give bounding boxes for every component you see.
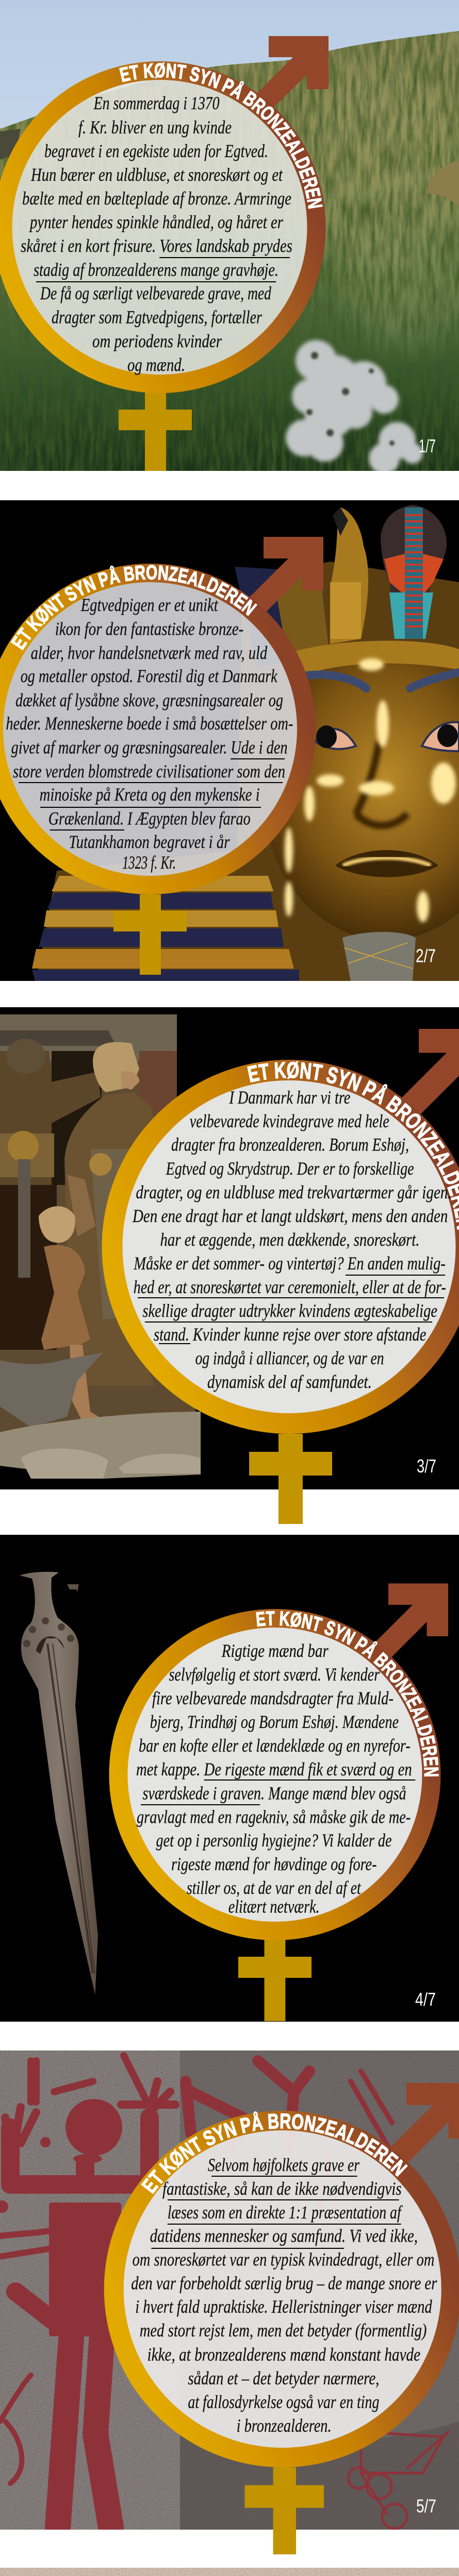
- body text: og mænd.: [127, 354, 185, 375]
- body text: [136, 1640, 415, 1917]
- text disc: [123, 2130, 442, 2448]
- body text: f. Kr. bliver en ung kvinde: [78, 117, 232, 138]
- body text: store verden blomstrede civilisationer som den: [13, 761, 285, 782]
- icon: male arrow: [382, 2083, 459, 2168]
- body text: Grækenland. I Ægypten blev farao: [48, 808, 251, 829]
- body text: Tutankhamon begravet i år: [69, 832, 230, 852]
- curved heading: ET KØNT SYN PÅ BRONZEALDEREN: [119, 62, 323, 209]
- icon: male arrow: [247, 537, 323, 617]
- background photo: golden mask: [0, 500, 459, 981]
- photo: bronze sword: [20, 1572, 98, 1995]
- background photo: grassy burial mound: [0, 0, 459, 474]
- body text: Hun bærer en uldbluse, et snoreskørt og et: [30, 164, 283, 185]
- body text: pynter hendes spinkle håndled, og håret er: [29, 212, 284, 232]
- icon: male arrow: [396, 1029, 459, 1122]
- body text: [132, 1087, 452, 1392]
- body text: sådan et – det betyder nærmere,: [188, 2368, 379, 2388]
- curved heading: ET KØNT SYN PÅ BRONZEALDEREN: [256, 1611, 439, 1776]
- body text: selvfølgelig et stort sværd. Vi kender: [169, 1664, 380, 1685]
- page number: 2/7: [416, 945, 436, 967]
- body text: [131, 2155, 437, 2436]
- ring: [3, 71, 317, 384]
- body text: og indgå i alliancer, og de var en: [195, 1348, 384, 1368]
- curved heading: ET KØNT SYN PÅ BRONZEALDEREN: [10, 565, 257, 650]
- text disc: [127, 1627, 423, 1923]
- panel 5: rock carvings: [0, 2050, 459, 2554]
- icon: male arrow: [254, 36, 329, 111]
- body text: om periodens kvinder: [92, 331, 222, 351]
- body text: minoiske på Kreta og den mykenske i: [40, 784, 260, 805]
- panel 2: Tutankhamun mask: [0, 500, 459, 981]
- text disc: [122, 1080, 456, 1414]
- body text: [6, 595, 293, 873]
- panel background: [0, 1535, 459, 2022]
- text disc: [11, 79, 307, 375]
- body text: De få og særligt velbevarede grave, med: [40, 283, 272, 303]
- panel 4: Bronze Age sword: [0, 1535, 459, 2022]
- body text: [21, 93, 292, 375]
- body text: givet af marker og græsningsarealer. Ude i den: [11, 737, 288, 757]
- body text: I Danmark har vi tre: [229, 1087, 350, 1108]
- ring: [112, 1070, 459, 1423]
- ring: [0, 573, 306, 885]
- body text: rigeste mænd for høvdinge og fore-: [171, 1854, 376, 1874]
- icon: female cross: [238, 1940, 312, 2021]
- body text: Selvom højfolkets grave er: [208, 2155, 360, 2175]
- page number: 1/7: [419, 435, 436, 456]
- panel 3: Bronze Age family painting: [0, 1007, 459, 1524]
- body text: En sommerdag i 1370: [93, 93, 220, 113]
- body text: elitært netværk.: [228, 1896, 320, 1917]
- icon: male arrow: [372, 1584, 448, 1662]
- body text: dækket af lysåbne skove, græsningsarealer og: [15, 690, 283, 710]
- body text: begravet i en egekiste uden for Egtved.: [44, 141, 268, 161]
- icon: female cross: [244, 2467, 324, 2554]
- page number: 3/7: [417, 1455, 436, 1477]
- text disc: [2, 581, 298, 877]
- ring: [114, 2121, 451, 2458]
- background photo: red rock carving figure: [0, 2050, 459, 2530]
- body text: Rigtige mænd bar: [221, 1640, 329, 1661]
- body text: bjerg, Trindhøj og Borum Eshøj. Mændene: [150, 1711, 399, 1732]
- background photo: orange-red figures on pale stone: [0, 2568, 459, 2576]
- painting: woman, man, child and dog: [0, 1014, 201, 1479]
- body text: Egtvedpigen er et unikt: [80, 595, 218, 615]
- body text: fire velbevarede mandsdragter fra Muld-: [152, 1688, 394, 1708]
- body text: at fallosdyrkelse også var en ting: [188, 2392, 379, 2412]
- body text: alder, hvor handelsnetværk med rav, uld: [31, 642, 268, 663]
- page number: 5/7: [416, 2496, 436, 2516]
- panel background: [0, 1007, 459, 1489]
- body text: dynamisk del af samfundet.: [207, 1371, 372, 1392]
- body text: velbevarede kvindegrave med hele: [190, 1111, 389, 1131]
- panel 1: Egtved woman and burial mound: [0, 0, 459, 471]
- curved heading: ET KØNT SYN PÅ BRONZEALDEREN: [141, 2111, 408, 2194]
- body text: ikon for den fantastiske bronze-: [55, 618, 243, 639]
- page number: 4/7: [415, 1989, 436, 2010]
- body text: 1323 f. Kr.: [122, 852, 176, 873]
- body text: get op i personlig hygiejne? Vi kalder de: [156, 1830, 392, 1851]
- body text: og metaller opstod. Forestil dig et Danmark: [21, 666, 277, 686]
- ring: [119, 1618, 431, 1931]
- body text: stiller os, at de var en del af et: [187, 1877, 361, 1898]
- body text: bælte med en bælteplade af bronze. Armringe: [22, 188, 291, 209]
- icon: female cross: [113, 894, 187, 975]
- icon: female cross: [249, 1434, 332, 1524]
- panel 6: rock carving on light stone: [0, 2568, 459, 2576]
- body text: skåret i en kort frisure. Vores landskab prydes: [21, 235, 292, 256]
- body text: fantastiske, så kan de ikke nødvendigvis: [162, 2178, 402, 2199]
- icon: female cross: [119, 393, 192, 471]
- body text: dragter som Egtvedpigens, fortæller: [52, 307, 263, 328]
- body text: stadig af bronzealderens mange gravhøje.: [34, 260, 278, 280]
- body text: heder. Menneskerne boede i små bosættelser om-: [6, 713, 293, 734]
- body text: i bronzealderen.: [237, 2415, 332, 2436]
